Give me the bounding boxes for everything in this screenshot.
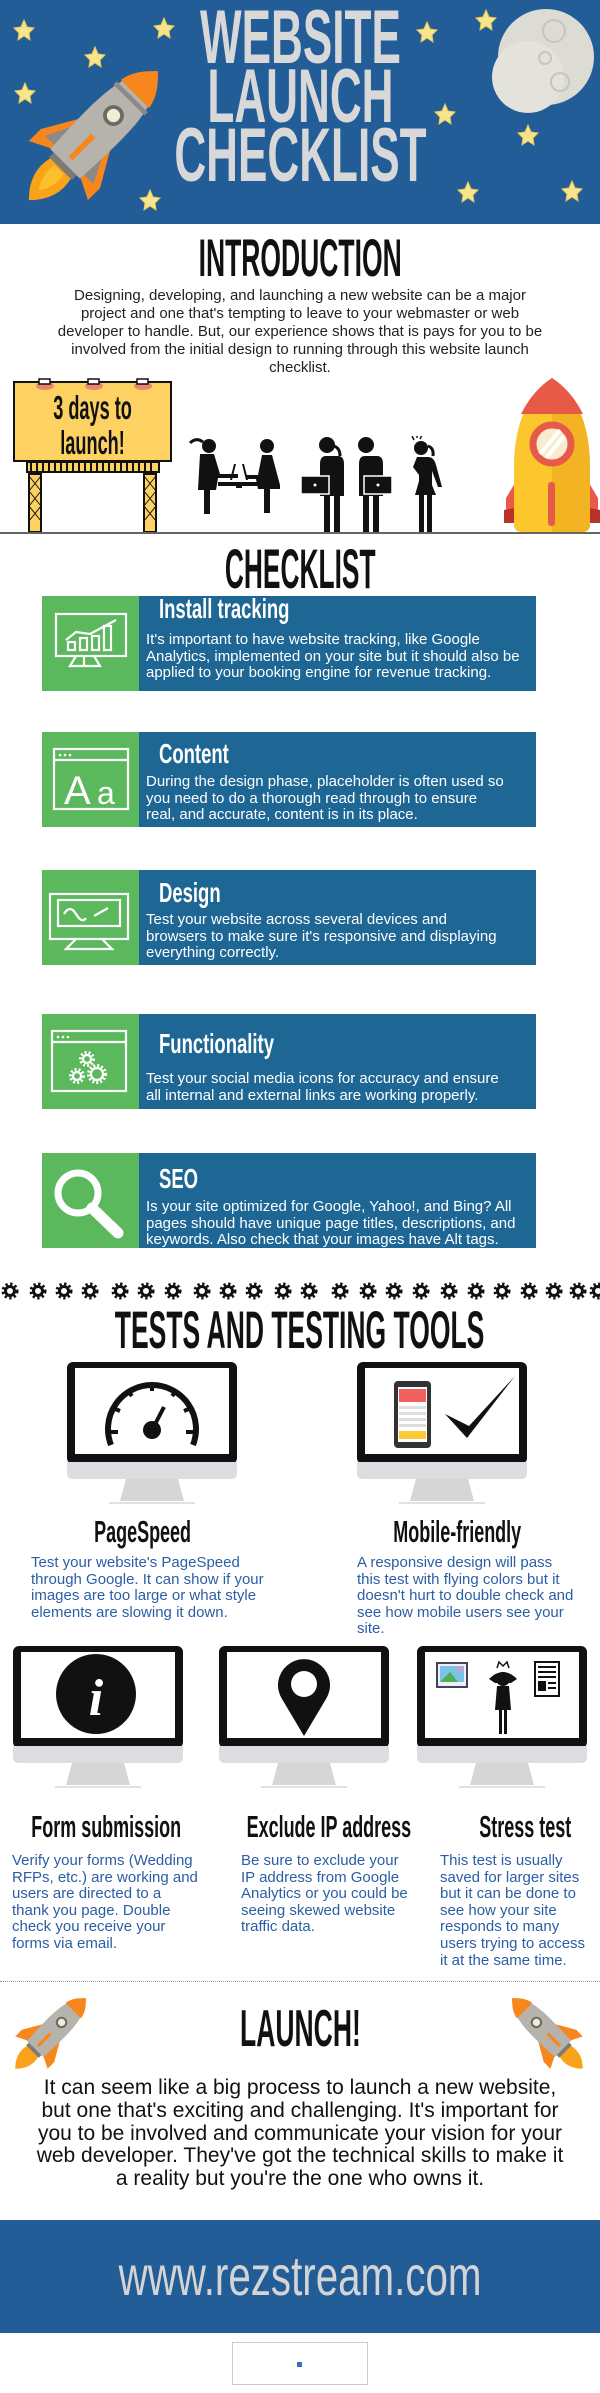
text: exclude IP: IP address from Google <box>241 1869 399 1886</box>
monitor: pagespeed speedometer <box>67 1362 237 1504</box>
header graphics: stars, moon, rocket <box>13 8 594 211</box>
text: keywords. Also check that your images have Alt tags. <box>146 1231 499 1248</box>
text: form: forms via email. <box>12 1935 117 1952</box>
text: pages should have unique page titles, descriptions, and <box>146 1215 515 1232</box>
icon: Aa window: A <box>64 769 91 813</box>
text: During the design phase, placeholder is often used so <box>146 773 504 790</box>
text: mobile: see how mobile users see your <box>357 1604 564 1621</box>
title: Content <box>159 738 229 769</box>
text: pagespeed: Test your website's PageSpeed <box>31 1554 240 1571</box>
text: everything correctly. <box>146 944 279 961</box>
text: pagespeed: through Google. It can show if your <box>31 1571 264 1588</box>
text: pagespeed <box>31 1554 264 1621</box>
text: exclude IP: Analytics or you could be <box>241 1885 408 1902</box>
text: form: thank you page. Double <box>12 1902 170 1919</box>
intro text: involved from the initial design to running through this website launch <box>71 341 529 358</box>
intro text: Designing, developing, and launching a new website can be a major <box>74 287 526 304</box>
text: stress: This test is usually <box>440 1852 563 1869</box>
intro text: checklist. <box>269 359 331 376</box>
title: CHECKLIST <box>174 113 426 198</box>
text: pagespeed: elements are slowing it down. <box>31 1604 228 1621</box>
text: form <box>12 1852 198 1952</box>
text <box>146 911 497 961</box>
text <box>146 773 504 823</box>
ground line <box>0 532 600 534</box>
heading: tests and testing tools: TESTS AND TESTING TOOLS <box>115 1301 485 1360</box>
text: all internal and external links are working properly. <box>146 1087 478 1104</box>
text: stress: users trying to access <box>440 1935 585 1952</box>
title: PageSpeed: PageSpeed <box>95 1514 191 1549</box>
text: stress: responds to many <box>440 1918 559 1935</box>
icon: rocket right <box>512 1998 583 2069</box>
text: mobile: doesn't hurt to double check and <box>357 1587 573 1604</box>
text: stress: but it can be done to <box>440 1885 576 1902</box>
checklist item: install tracking <box>42 596 536 691</box>
launch text: you to be involved and communicate your vision for your <box>38 2122 562 2145</box>
checklist item: design <box>42 870 536 965</box>
monitor: mobile-friendly <box>357 1362 527 1504</box>
icon: design monitor <box>42 870 139 965</box>
header banner <box>0 0 600 224</box>
title: Mobile-friendly: Mobile-friendly <box>393 1514 521 1549</box>
text: browsers to make sure it's responsive and displaying <box>146 928 497 945</box>
billboard text: 3 days to <box>54 389 132 426</box>
text <box>146 1070 499 1104</box>
title: Stress test: Stress test <box>479 1809 571 1844</box>
icon: Aa window <box>42 732 139 827</box>
icon: people working <box>189 436 442 532</box>
billboard text <box>54 389 132 461</box>
title: SEO <box>159 1163 198 1194</box>
text: stress: saved for larger sites <box>440 1869 579 1886</box>
title: Exclude IP address: Exclude IP address <box>247 1809 411 1844</box>
icon: rocket left <box>15 1998 86 2069</box>
intro text: project and one that's tempting to leave to your webmaster or web <box>81 305 519 322</box>
text <box>146 1198 515 1248</box>
title: Functionality <box>159 1028 274 1059</box>
icon: analytics monitor <box>42 596 139 691</box>
text: Analytics, implemented on your site but it should also be <box>146 648 520 665</box>
heading: introduction: INTRODUCTION <box>198 229 402 288</box>
heading: launch: LAUNCH! <box>240 2000 360 2058</box>
checklist item: SEO <box>42 1153 536 1248</box>
text: form: check you receive your <box>12 1918 165 1935</box>
icon: Aa window: a <box>97 775 115 811</box>
icon: yellow rocket <box>504 378 600 532</box>
checklist item: functionality <box>42 1014 536 1109</box>
text: real, and accurate, content is in its place. <box>146 806 418 823</box>
launch text: web developer. They've got the technical skills to make it <box>37 2144 563 2167</box>
text: form: Verify your forms (Wedding <box>12 1852 193 1869</box>
text: It's important to have website tracking, like Google <box>146 631 480 648</box>
monitor: info: i <box>89 1670 104 1727</box>
text: pagespeed: images are too large or what style <box>31 1587 256 1604</box>
footer url: www.rezstream.com <box>119 2244 481 2307</box>
title: Install tracking <box>159 593 289 624</box>
monitor: location pin <box>219 1646 389 1788</box>
monitor: info <box>13 1646 183 1788</box>
text: form: RFPs, etc.) are working and <box>12 1869 198 1886</box>
billboard: 3 days to launch <box>13 378 172 532</box>
launch text: It can seem like a big process to launch a new website, <box>44 2076 556 2099</box>
text: exclude IP <box>241 1852 408 1935</box>
text: Test your social media icons for accuracy and ensure <box>146 1070 499 1087</box>
footer banner <box>0 2220 600 2333</box>
text: exclude IP: Be sure to exclude your <box>241 1852 399 1869</box>
text: stress: see how your site <box>440 1902 557 1919</box>
title <box>174 0 426 198</box>
title: Form submission: Form submission <box>31 1809 181 1844</box>
title: Design <box>159 877 221 908</box>
text: you need to do a thorough read through to ensure <box>146 790 477 807</box>
text: Is your site optimized for Google, Yahoo!, and Bing? All <box>146 1198 512 1215</box>
dotted divider <box>0 1981 600 1982</box>
text: exclude IP: traffic data. <box>241 1918 315 1935</box>
text: stress <box>440 1852 585 1969</box>
text: exclude IP: seeing skewed website <box>241 1902 395 1919</box>
text: form: users are directed to a <box>12 1885 161 1902</box>
launch text: but one that's exciting and challenging. It's important for <box>42 2099 558 2122</box>
monitor: stress <box>417 1646 587 1788</box>
text: mobile: A responsive design will pass <box>357 1554 552 1571</box>
billboard text: launch! <box>61 424 125 461</box>
text: Test your website across several devices and <box>146 911 447 928</box>
intro text <box>58 287 542 376</box>
launch text <box>36 2076 564 2190</box>
launch text: a reality but you're the one who owns it. <box>116 2167 484 2190</box>
text <box>146 631 520 681</box>
text: stress: it at the same time. <box>440 1952 567 1969</box>
intro text: developer to handle. But, our experience shows that is pays for you to be <box>58 323 542 340</box>
small badge box <box>232 2342 368 2385</box>
checklist item: content <box>42 732 536 827</box>
icon: gears window <box>42 1014 139 1109</box>
title: LAUNCH <box>207 54 393 139</box>
text: mobile <box>357 1554 573 1637</box>
divider: gear row <box>2 1282 600 1300</box>
icon: magnifier <box>42 1153 139 1248</box>
text: mobile: this test with flying colors but it <box>357 1571 560 1588</box>
text: applied to your booking engine for revenue tracking. <box>146 664 491 681</box>
text: mobile: site. <box>357 1620 385 1637</box>
heading: checklist: CHECKLIST <box>225 537 375 600</box>
